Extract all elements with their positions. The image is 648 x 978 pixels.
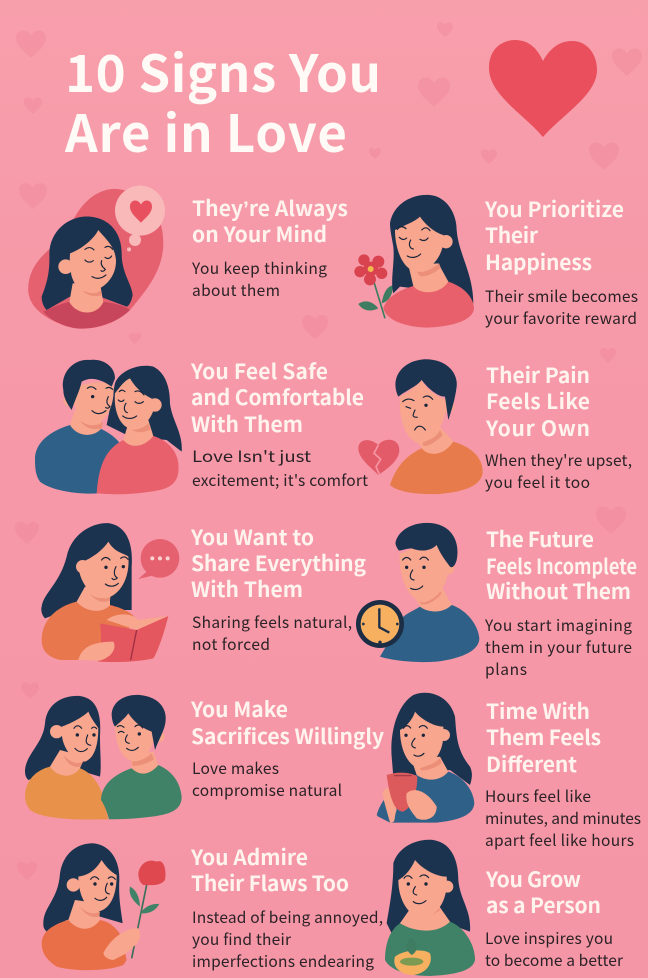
heading line 3: With Them bbox=[191, 574, 303, 604]
title bbox=[64, 33, 381, 167]
heading line 3: With Them bbox=[191, 409, 303, 439]
heading: You Make bbox=[190, 694, 288, 724]
heading line 2: on Your Mind bbox=[192, 219, 327, 249]
illustration: woman with book and speech bubble bbox=[41, 523, 179, 662]
sign 10: grow as a person bbox=[385, 840, 624, 976]
illustration: sad man with broken heart bbox=[358, 359, 483, 494]
heading: You Grow bbox=[485, 864, 581, 894]
heading: You Admire bbox=[190, 842, 308, 872]
heading: Time With bbox=[486, 696, 590, 726]
description line 2: about them bbox=[192, 279, 280, 301]
illustration: woman holding plant bbox=[385, 840, 475, 976]
description line 2: excitement; it's comfort bbox=[192, 469, 368, 491]
sign 9: admire flaws bbox=[42, 842, 383, 972]
description: You start imagining bbox=[484, 614, 632, 636]
description: You keep thinking bbox=[191, 257, 327, 279]
title: 10 Signs You bbox=[65, 33, 381, 107]
description: Sharing feels natural, bbox=[192, 611, 352, 633]
heading: The Future bbox=[486, 524, 594, 554]
description line 2: to become a better bbox=[485, 949, 624, 971]
illustration: man with clock bbox=[356, 523, 479, 662]
illustration: woman and man smiling bbox=[25, 695, 182, 820]
illustration: woman with mug bbox=[377, 693, 474, 823]
heading line 2: Sacrifices Willingly bbox=[191, 721, 384, 751]
sign 5: share everything bbox=[41, 522, 366, 662]
description line 2: you feel it too bbox=[485, 471, 590, 493]
sign 6: future feels incomplete bbox=[356, 523, 637, 680]
heading: You Feel Safe bbox=[190, 356, 328, 386]
heading line 3: Without Them bbox=[486, 576, 631, 606]
description: Their smile becomes bbox=[485, 285, 638, 307]
description line 2: not forced bbox=[192, 633, 270, 655]
heading: They’re Always bbox=[192, 193, 348, 223]
description line 2: your favorite reward bbox=[485, 307, 637, 329]
heading line 2: Their bbox=[485, 220, 539, 250]
sign 2: prioritize happiness bbox=[354, 194, 638, 329]
sign 8: time feels different bbox=[377, 693, 641, 851]
heading line 3: Happiness bbox=[485, 247, 592, 277]
description: When they're upset, bbox=[485, 449, 632, 471]
description line 3: plans bbox=[485, 658, 527, 680]
icon: big heart bbox=[489, 40, 597, 137]
description: Love inspires you bbox=[485, 927, 613, 949]
description: Love makes bbox=[192, 757, 279, 779]
illustration: woman with flower bbox=[354, 195, 474, 328]
description line 2: minutes, and minutes bbox=[485, 807, 641, 829]
illustration: woman holding rose bbox=[42, 843, 166, 970]
sign 3: safe and comfortable bbox=[35, 356, 368, 494]
description: Hours feel like bbox=[485, 785, 591, 807]
heading line 2: Them Feels bbox=[486, 722, 601, 752]
illustration: couple leaning together bbox=[35, 360, 182, 494]
heading line 2: Feels Like bbox=[486, 386, 590, 416]
description line 3: apart feel like hours bbox=[485, 829, 634, 851]
heading line 3: Different bbox=[486, 749, 577, 779]
heading line 2: Their Flaws Too bbox=[191, 868, 349, 898]
sign 4: their pain feels like your own bbox=[358, 359, 632, 494]
description line 2: compromise natural bbox=[192, 779, 342, 801]
description: Instead of being annoyed, bbox=[192, 906, 383, 928]
heading line 2: and Comfortable bbox=[191, 382, 364, 412]
heading: You Prioritize bbox=[484, 194, 624, 224]
heading line 3: Your Own bbox=[485, 413, 590, 443]
illustration: woman thinking of heart bbox=[28, 186, 165, 329]
heading: Their Pain bbox=[486, 360, 590, 390]
sign 7: sacrifices willingly bbox=[25, 694, 384, 820]
heading: You Want to bbox=[190, 522, 314, 552]
description: Love Isn't just bbox=[192, 445, 311, 467]
heading line 2: Share Everything bbox=[191, 548, 366, 578]
description line 2: them in your future bbox=[485, 636, 632, 658]
description line 3: imperfections endearing bbox=[192, 950, 374, 972]
title: Are in Love bbox=[64, 93, 347, 167]
heading line 2: as a Person bbox=[486, 890, 601, 920]
sign 1: always on your mind bbox=[28, 186, 348, 329]
description line 2: you find their bbox=[192, 928, 292, 950]
